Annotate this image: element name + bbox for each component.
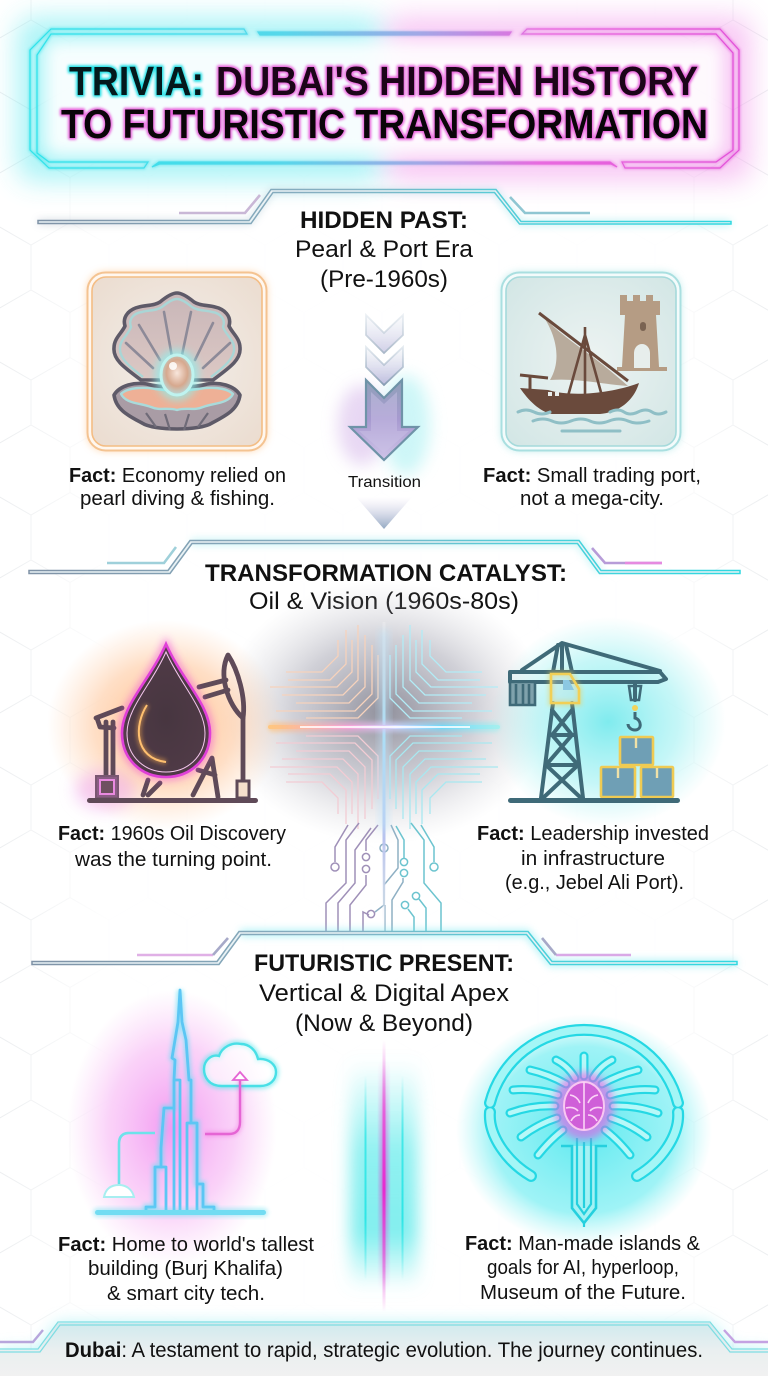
heading text: FUTURISTIC PRESENT:	[254, 950, 514, 977]
footer banner	[0, 1322, 768, 1376]
heading text: Pearl & Port Era	[295, 236, 474, 263]
title text	[61, 58, 708, 147]
title text glow: TO FUTURISTIC TRANSFORMATION	[61, 101, 708, 147]
heading text	[205, 560, 567, 615]
section header: transformation catalyst	[29, 540, 740, 615]
heading text: TRANSFORMATION CATALYST:	[205, 560, 567, 587]
fact: man-made islands: Fact: Man-made islands &	[465, 1233, 701, 1255]
fact: infrastructure: (e.g., Jebel Ali Port).	[505, 872, 684, 894]
fact: man-made islands: goals for AI, hyperloop,	[487, 1257, 679, 1279]
heading text: Oil & Vision (1960s-80s)	[249, 588, 519, 615]
circuit traces: lower	[326, 823, 441, 933]
fact: burj khalifa: building (Burj Khalifa)	[88, 1258, 283, 1280]
panel: trading port	[501, 272, 681, 451]
icon: open shell with pearl	[114, 293, 240, 430]
title banner	[18, 18, 750, 180]
palm trunk	[561, 1138, 607, 1227]
fact: infrastructure	[477, 823, 709, 894]
fact: man-made islands	[465, 1233, 701, 1304]
fact: pearl diving: Fact: Economy relied on	[69, 465, 286, 487]
fact: infrastructure: in infrastructure	[521, 848, 665, 870]
connector and dome	[104, 1133, 155, 1197]
icon: oil drop and pumpjack	[47, 620, 283, 830]
fact: burj khalifa: & smart city tech.	[107, 1283, 265, 1305]
fact: burj khalifa: Fact: Home to world's tallest	[58, 1234, 314, 1256]
divider: vertical neon beams	[350, 1040, 418, 1312]
chart: central circuit board with light burst	[219, 580, 549, 934]
footer text: Dubai: A testament to rapid, strategic evolution. The journey continues.	[65, 1339, 703, 1362]
fact: trading port: not a mega-city.	[520, 488, 664, 510]
fact: oil discovery: Fact: 1960s Oil Discovery	[58, 823, 286, 845]
horizontal light beam	[268, 722, 500, 732]
heading text	[254, 950, 514, 1037]
panel: pearl shell	[87, 272, 267, 451]
cloud	[204, 1044, 276, 1086]
fact: trading port: Fact: Small trading port,	[483, 465, 701, 487]
transition label: Transition	[348, 474, 421, 491]
heading text: Vertical & Digital Apex	[259, 980, 509, 1007]
title text glow: TRIVIA:	[69, 58, 204, 104]
title text glow: DUBAI'S HIDDEN HISTORY	[216, 58, 698, 104]
heading text: (Now & Beyond)	[295, 1010, 473, 1037]
title text: DUBAI'S HIDDEN HISTORY	[216, 58, 698, 104]
icon: waves	[518, 410, 666, 431]
arrow: lower chevron	[356, 497, 412, 529]
icon: dhow boat	[520, 313, 639, 414]
arrow: burj to cloud	[205, 1072, 247, 1134]
palm arcs	[490, 1030, 678, 1176]
fact: burj khalifa	[58, 1234, 314, 1305]
brain	[554, 1072, 614, 1140]
fact: man-made islands: Museum of the Future.	[480, 1282, 686, 1304]
title text: TRIVIA:	[69, 58, 204, 104]
arrow: transition chevrons	[338, 315, 430, 475]
heading text: HIDDEN PAST:	[300, 207, 468, 234]
heading text	[295, 207, 474, 293]
title text glow	[61, 58, 708, 147]
fact: oil discovery	[58, 823, 286, 871]
containers	[601, 737, 673, 797]
circuit traces: upper	[270, 625, 498, 829]
fact: trading port	[483, 465, 701, 510]
palm fronds	[510, 1056, 658, 1155]
fact: pearl diving	[69, 465, 286, 510]
vertical light beam	[382, 622, 386, 934]
fact: infrastructure: Fact: Leadership invested	[477, 823, 709, 845]
icon: tower	[617, 295, 667, 371]
icon: palm island with brain	[456, 1014, 712, 1246]
fact: oil discovery: was the turning point.	[74, 849, 272, 871]
section header: hidden past	[38, 190, 731, 293]
fact: pearl diving: pearl diving & fishing.	[80, 488, 275, 510]
section header: futuristic present	[32, 932, 737, 1037]
icon: burj khalifa with cloud	[67, 990, 277, 1266]
title text: TO FUTURISTIC TRANSFORMATION	[61, 101, 708, 147]
icon: crane with containers	[490, 617, 726, 827]
heading text: (Pre-1960s)	[320, 266, 448, 293]
